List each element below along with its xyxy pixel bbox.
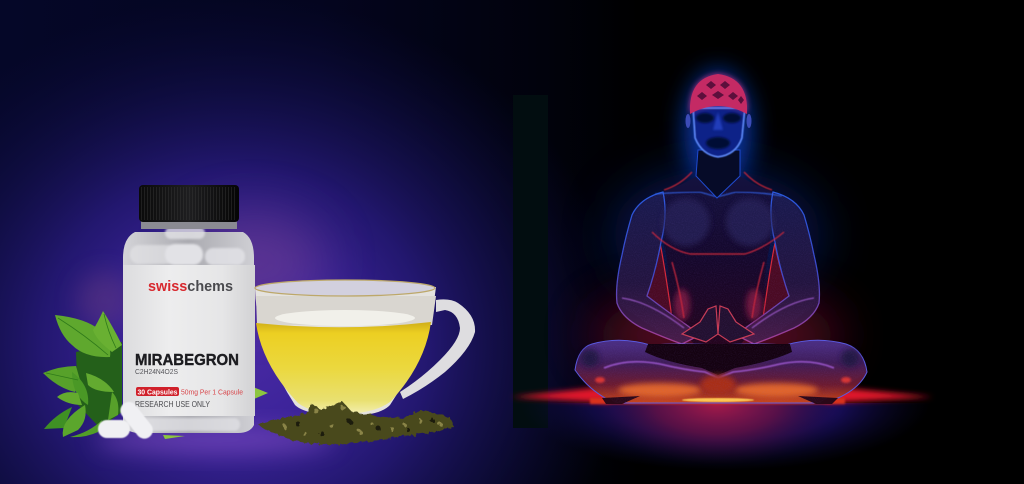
muscle lines <box>652 172 784 318</box>
product name: MIRABEGRON <box>135 352 239 369</box>
ears <box>686 114 752 128</box>
capsules in jar <box>130 227 245 431</box>
left arm <box>617 192 700 344</box>
forearm highlight <box>622 298 814 328</box>
right arm <box>736 192 819 344</box>
brain pattern <box>697 81 744 104</box>
tea cup <box>255 280 475 416</box>
neck <box>141 221 237 229</box>
faint image strip <box>513 95 548 428</box>
halo glow <box>592 70 842 375</box>
dosage: 50mg Per 1 Capsule <box>181 388 243 396</box>
knee shadows <box>581 349 859 367</box>
glass jar <box>123 232 254 433</box>
loose tea pile <box>258 401 454 444</box>
research note: RESEARCH USE ONLY <box>135 400 211 409</box>
floor reflection <box>538 403 915 466</box>
leaf midribs <box>46 314 116 380</box>
brain cap glow <box>690 74 747 112</box>
capsule count badge: 30 Capsules <box>138 390 178 396</box>
hands <box>682 306 754 342</box>
label <box>123 265 255 416</box>
head <box>693 108 745 157</box>
illustration: glowing meditating man <box>511 70 933 471</box>
lap shadow <box>645 344 792 375</box>
legs <box>575 340 867 403</box>
brand: swisschems <box>148 278 233 295</box>
brain cap <box>690 74 747 114</box>
nose highlight <box>713 112 723 130</box>
leaf backing <box>76 342 122 428</box>
tea leaves plant <box>43 311 268 439</box>
rim <box>255 280 435 296</box>
leg fire glow <box>595 375 851 402</box>
arm gaps <box>645 243 790 330</box>
calf highlight <box>604 362 834 378</box>
chest <box>662 198 774 246</box>
cup glass <box>255 287 436 416</box>
floor red streaks <box>511 386 933 404</box>
upper glass shade <box>256 296 436 325</box>
loose capsules <box>98 399 156 442</box>
formula: C2H24N4O2S <box>135 369 178 376</box>
handle <box>400 299 475 399</box>
shoulder line <box>655 192 782 197</box>
torso <box>663 176 773 345</box>
neck <box>696 150 740 198</box>
abdomen side glow <box>674 289 762 321</box>
foot shadows <box>602 396 838 404</box>
body speckle <box>575 192 867 403</box>
product bottle <box>123 185 255 433</box>
inner highlight <box>275 310 415 326</box>
face shading <box>696 113 741 149</box>
tea liquid <box>256 322 431 414</box>
cap <box>139 185 239 222</box>
